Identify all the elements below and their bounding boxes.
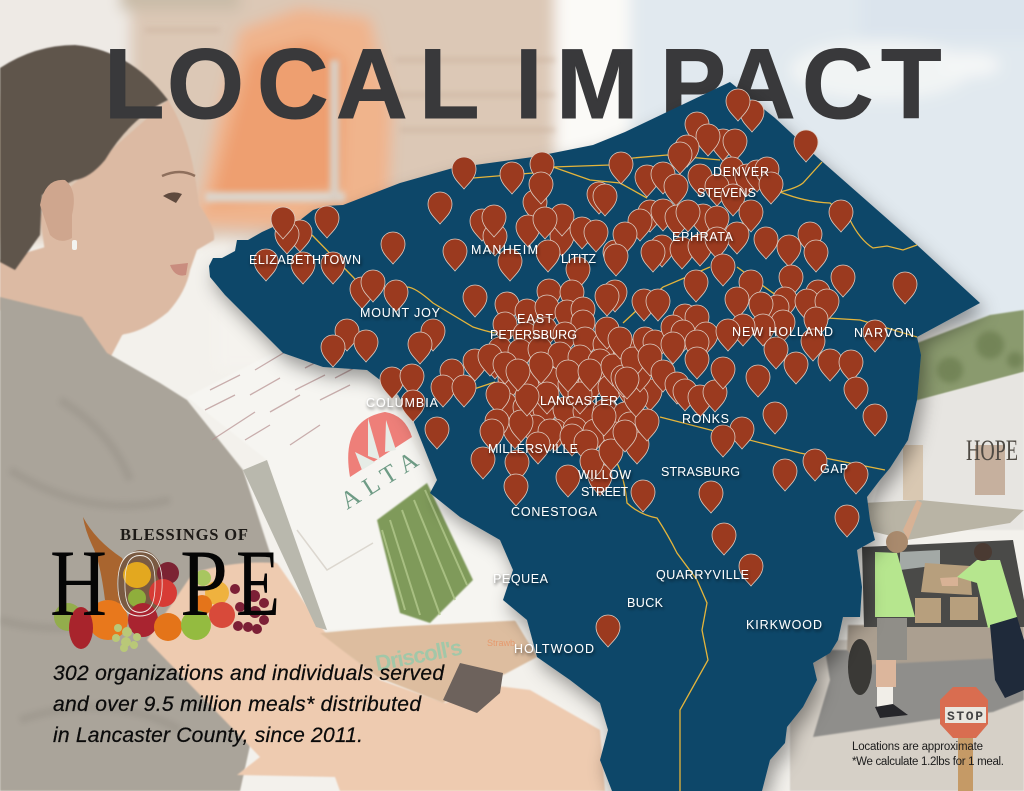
logo small heading: BLESSINGS OF xyxy=(120,525,248,544)
logo HOPE wordmark: E xyxy=(236,530,280,636)
ALTA asparagus tips xyxy=(355,418,396,470)
logo HOPE wordmark: P xyxy=(180,530,228,636)
Stevens: STEVENS xyxy=(697,186,756,200)
county shape xyxy=(209,82,980,791)
pavement xyxy=(790,640,1024,791)
Quarryville: QUARRYVILLE xyxy=(656,568,749,582)
strawberries printed label: Strawb xyxy=(487,638,515,648)
Strasburg: STRASBURG xyxy=(661,465,740,479)
wheel xyxy=(848,639,872,695)
ALTA box word: ALTA xyxy=(336,447,423,515)
box flap xyxy=(297,530,373,570)
earring xyxy=(72,240,77,250)
city labels xyxy=(249,165,914,656)
fruit pile xyxy=(54,562,269,652)
tailgate xyxy=(863,500,1024,540)
Blessings of Hope logo xyxy=(50,517,280,652)
Narvon: NARVON xyxy=(854,326,914,340)
Holtwood: HOLTWOOD xyxy=(514,642,594,656)
hair xyxy=(0,45,168,270)
box side strip xyxy=(243,460,327,630)
photo: woman carrying produce box xyxy=(0,45,605,791)
county map xyxy=(209,82,980,791)
East Petersburg line two: PETERSBURG xyxy=(490,328,577,342)
East Petersburg line one: EAST xyxy=(517,312,553,326)
Ronks: RONKS xyxy=(682,412,729,426)
car window xyxy=(900,550,940,570)
roads xyxy=(312,155,917,791)
logo HOPE wordmark: H xyxy=(50,530,107,636)
trees xyxy=(912,310,1024,402)
eye xyxy=(163,192,182,203)
cornucopia rim xyxy=(117,550,165,618)
car interior xyxy=(862,540,1024,627)
meal calculation note: *We calculate 1.2lbs for 1 meal. xyxy=(852,756,1004,768)
footnotes xyxy=(852,741,1004,768)
car body xyxy=(847,625,1024,665)
New Holland: NEW HOLLAND xyxy=(732,325,833,339)
line one: 302 organizations and individuals served xyxy=(53,662,445,685)
ear xyxy=(40,180,74,241)
asparagus window xyxy=(377,483,473,623)
shirt folds xyxy=(0,400,180,730)
face xyxy=(40,100,214,335)
impact statement xyxy=(53,662,445,747)
location pins xyxy=(254,89,917,647)
produce box xyxy=(187,353,527,630)
Willow Street line two: STREET xyxy=(581,485,628,499)
truck trailer xyxy=(865,372,1024,530)
Pequea: PEQUEA xyxy=(493,572,549,586)
Conestoga: CONESTOGA xyxy=(511,505,598,519)
truck mural xyxy=(903,434,1018,500)
Ephrata: EPHRATA xyxy=(672,230,734,244)
Driscoll's printed label: Driscoll's xyxy=(373,635,464,676)
logo HOPE wordmark xyxy=(50,530,280,636)
ALTA logo arch xyxy=(348,412,412,477)
Lancaster: LANCASTER xyxy=(540,394,618,408)
Lititz: LITITZ xyxy=(561,252,596,266)
Columbia: COLUMBIA xyxy=(366,396,439,410)
phone xyxy=(443,663,503,713)
Mount Joy: MOUNT JOY xyxy=(360,306,441,320)
shirt xyxy=(0,297,300,791)
stop sign: STOP xyxy=(947,709,983,724)
line three: in Lancaster County, since 2011. xyxy=(53,724,363,747)
eyebrow xyxy=(162,172,195,176)
cornucopia horn xyxy=(83,517,129,605)
Buck: BUCK xyxy=(627,596,664,610)
photo: trees, truck, car and volunteers xyxy=(790,310,1024,791)
volunteer right xyxy=(940,543,1024,698)
asphalt shadow xyxy=(813,650,1024,737)
Elizabethtown: ELIZABETHTOWN xyxy=(249,253,361,267)
neck xyxy=(0,240,130,362)
Willow Street line one: WILLOW xyxy=(578,468,631,482)
Millersville: MILLERSVILLE xyxy=(488,442,578,456)
box top slits xyxy=(205,352,360,445)
title: LOCAL IMPACT xyxy=(104,28,941,139)
cardboard tray xyxy=(320,617,537,703)
Kirkwood: KIRKWOOD xyxy=(746,618,822,632)
asparagus stalks xyxy=(382,490,467,615)
cargo boxes xyxy=(915,563,978,623)
Manheim: MANHEIM xyxy=(471,243,538,257)
forearm and hand xyxy=(147,562,605,791)
locations note: Locations are approximate xyxy=(852,741,983,753)
Gap: GAP xyxy=(820,462,848,476)
line two: and over 9.5 million meals* distributed xyxy=(53,693,422,716)
foliage shading xyxy=(937,331,1023,383)
Denver: DENVER xyxy=(713,165,769,179)
mouth xyxy=(170,263,188,276)
logo HOPE wordmark: O xyxy=(115,530,165,636)
stop sign xyxy=(940,687,988,791)
volunteer left xyxy=(875,500,922,718)
